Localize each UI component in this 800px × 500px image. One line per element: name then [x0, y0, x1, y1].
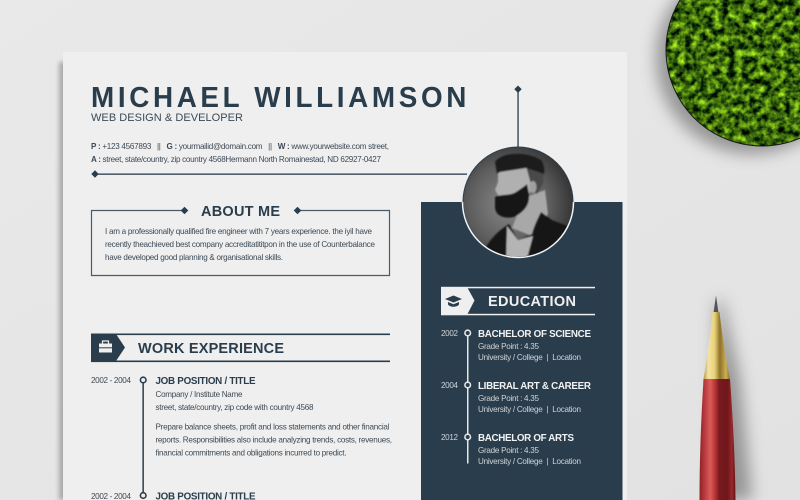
work experience heading: WORK EXPERIENCE: [138, 341, 284, 357]
job subtitle: WEB DESIGN & DEVELOPER: [91, 112, 243, 124]
work experience band: [91, 334, 390, 362]
side hair: [528, 168, 544, 194]
education entry 3: [441, 433, 581, 466]
job entry 1: 2002 - 2004: [91, 376, 131, 385]
education entry 3: University / College | Location: [478, 457, 581, 466]
plant shadow: [656, 0, 800, 154]
hair top: [495, 154, 544, 174]
pen red barrel: [700, 379, 736, 500]
about me frame: [92, 210, 390, 276]
education entry 2: Grade Point : 4.35: [478, 394, 539, 403]
education entry 2: 2004: [441, 381, 458, 390]
panel: education: [421, 202, 622, 500]
about me text: recently theachieved best company accreditatititpon in the use of Counterbalance: [105, 240, 375, 249]
education entry 3: BACHELOR OF ARTS: [478, 433, 574, 444]
face: [495, 166, 532, 198]
education heading: EDUCATION: [488, 294, 576, 310]
job entry 1: Prepare balance sheets, profit and loss statements and other financial: [156, 422, 390, 432]
education band: [441, 287, 595, 315]
job entry 1: [91, 376, 392, 458]
education entry 2: LIBERAL ART & CAREER: [478, 381, 591, 392]
pen: [700, 296, 736, 500]
ear: [530, 181, 536, 193]
about me text: [105, 227, 375, 262]
profile photo: [462, 146, 576, 262]
icon: graduation cap: [445, 296, 462, 307]
contact details: A : street, state/country, zip country 4568Hermann North Romainestad, ND 62927-0427: [91, 155, 381, 164]
beard: [495, 184, 529, 218]
about me text: I am a professionally qualified fire engineer with 7 years experience. the iyil have: [105, 227, 372, 236]
education entry 1: Grade Point : 4.35: [478, 342, 539, 351]
timeline: [140, 377, 146, 498]
about me text: have developed good planning & organisational skills.: [105, 253, 283, 262]
education entry 1: [441, 329, 591, 362]
resume paper: [63, 52, 627, 500]
paper sheet shadow: [59, 62, 67, 500]
pen gold cone: [704, 312, 730, 379]
job entry 1: Company / Institute Name: [156, 390, 243, 399]
about me heading: ABOUT ME: [201, 204, 280, 220]
plant foliage: [660, 0, 800, 150]
education entry 2: [441, 381, 591, 414]
job entry 1: street, state/country, zip code with country 4568: [156, 403, 314, 412]
neck: [512, 190, 548, 236]
shirt: [506, 226, 533, 262]
pen shadow: [716, 300, 752, 500]
job entry 2: [91, 492, 256, 500]
job entry 1: financial commitments and obligations incurred to predict.: [156, 448, 346, 458]
name heading: MICHAEL WILLIAMSON: [91, 81, 466, 114]
education entry 3: 2012: [441, 433, 458, 442]
plant pot: [666, 0, 800, 146]
education entry 1: BACHELOR OF SCIENCE: [478, 329, 591, 340]
panel: work experience: [91, 334, 392, 500]
job entry 1: JOB POSITION / TITLE: [156, 376, 256, 387]
about me diamonds: [181, 207, 301, 214]
education entry 3: Grade Point : 4.35: [478, 446, 539, 455]
education entry 2: University / College | Location: [478, 405, 581, 414]
jacket: [486, 212, 567, 256]
job entry 1: reports. Responsibilities also include analyzing trends, costs, revenues,: [156, 436, 392, 444]
education background: [421, 202, 622, 500]
education entry 1: University / College | Location: [478, 353, 581, 362]
header connector lines: [91, 86, 522, 178]
education entry 1: 2002: [441, 329, 458, 338]
education timeline: [465, 330, 471, 464]
contact details: [91, 142, 389, 164]
icon: briefcase: [99, 341, 112, 352]
panel: about me: [92, 204, 390, 276]
contact details: P : +123 4567893 || G : yourmailid@domain.com || W : www.yourwebsite.com street,: [91, 142, 389, 151]
pen nib: [714, 296, 718, 313]
